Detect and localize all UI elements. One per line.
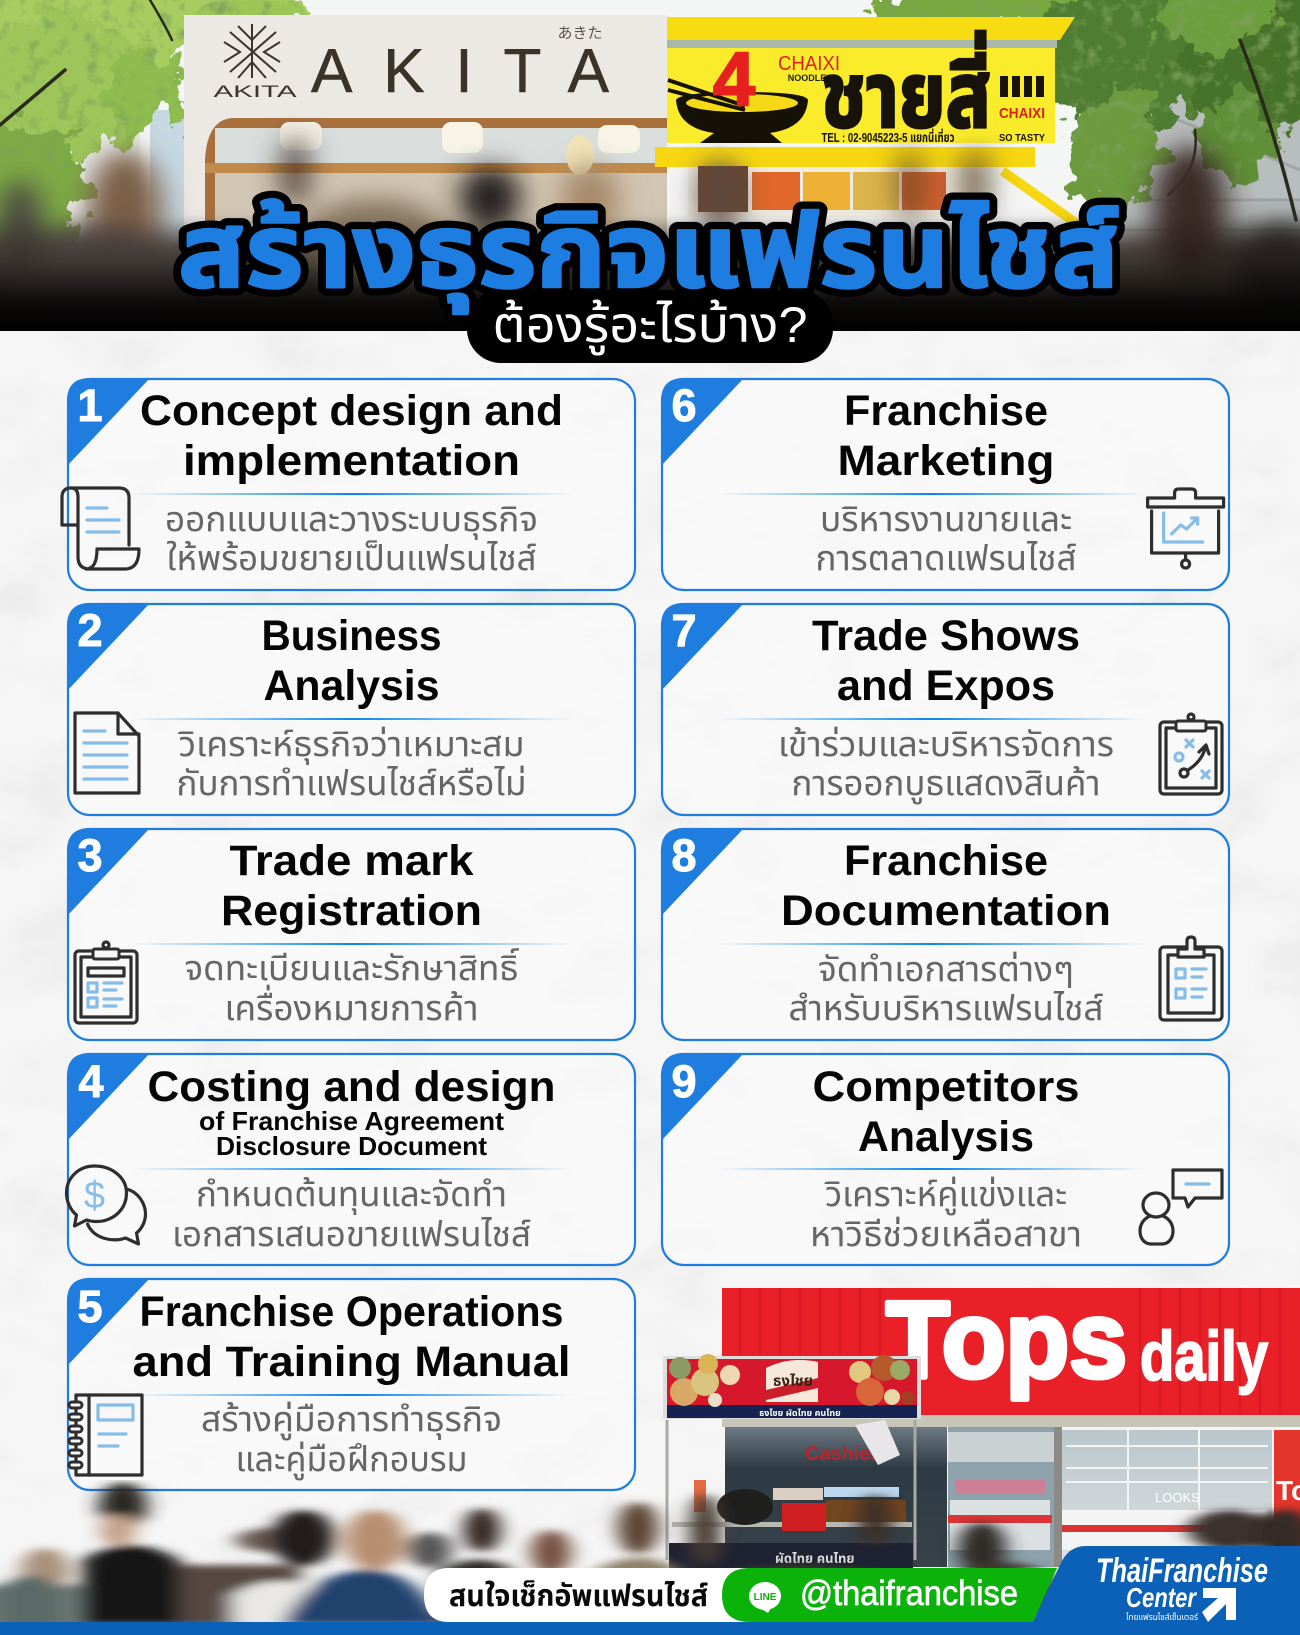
photo: Tops daily store: daily xyxy=(1140,1317,1268,1395)
subtitle pill: ต้องรู้อะไรบ้าง? xyxy=(492,297,808,355)
cart counter xyxy=(669,1420,913,1568)
cart counter: ผัดไทย คนไทย xyxy=(775,1551,854,1566)
Chaixi yellow sign: TEL : 02-9045223-5 แยกนี่เที่ยว xyxy=(822,128,955,145)
card 3 xyxy=(67,828,635,1040)
card 8 xyxy=(661,828,1229,1040)
icon: logo arrow xyxy=(1202,1588,1236,1622)
card 9: หาวิธีช่วยเหลือสาขา xyxy=(810,1215,1082,1254)
photo: food cart: ธงไชย xyxy=(773,1373,813,1390)
card 7 xyxy=(661,603,1229,815)
CTA: white pill xyxy=(424,1568,770,1622)
card 4 xyxy=(66,1053,635,1265)
card 5: 5 xyxy=(77,1281,103,1332)
background buildings xyxy=(85,94,1300,246)
CTA: green LINE pill xyxy=(722,1568,1057,1622)
tree trunks xyxy=(0,0,1296,220)
card 1 xyxy=(62,378,635,590)
card 5: Franchise Operations xyxy=(140,1288,564,1336)
card 6: Marketing xyxy=(838,437,1054,485)
card 2: Business xyxy=(262,612,442,660)
food strip xyxy=(698,166,946,212)
noodle bowl xyxy=(676,92,808,143)
card 7: เข้าร่วมและบริหารจัดการ xyxy=(778,725,1114,764)
card 7: and Expos xyxy=(837,662,1055,710)
icon: spiral notebook xyxy=(69,1395,142,1475)
icon: document xyxy=(75,713,139,793)
card 1: ออกแบบและวางระบบธุรกิจ xyxy=(165,500,538,540)
Akita store wall: あきた xyxy=(557,25,603,42)
card 6: บริหารงานขายและ xyxy=(820,500,1072,539)
trees right xyxy=(870,0,1300,215)
card 6: Franchise xyxy=(844,387,1048,435)
Akita store wall: AKITA xyxy=(311,37,610,106)
card 9 xyxy=(661,1053,1229,1265)
card 2: กับการทำแฟรนไชส์หรือไม่ xyxy=(176,764,526,803)
card 8: จัดทำเอกสารต่างๆ xyxy=(818,950,1074,989)
card 9: Competitors xyxy=(812,1063,1080,1111)
CTA: green LINE pill: @thaifranchise xyxy=(800,1574,1018,1613)
Akita store wall xyxy=(184,15,667,245)
card 4: 4 xyxy=(78,1056,104,1107)
Akita snowflake logo xyxy=(224,24,280,78)
card 2: วิเคราะห์ธุรกิจว่าเหมาะสม xyxy=(178,725,524,765)
card 4: กำหนดต้นทุนและจัดทำ xyxy=(196,1175,507,1215)
icon: chat bubbles with dollar xyxy=(66,1166,146,1244)
subtitle pill xyxy=(467,290,833,363)
main title: สร้างธุรกิจแฟรนไชส์ xyxy=(178,194,1119,314)
card 9: วิเคราะห์คู่แข่งและ xyxy=(825,1175,1067,1215)
trees left xyxy=(0,0,310,260)
icon: LINE xyxy=(749,1582,781,1613)
card 3: Trade mark xyxy=(230,837,474,885)
card 8: Documentation xyxy=(781,887,1111,935)
photo: Tops daily store xyxy=(722,1279,1300,1567)
card 5: สร้างคู่มือการทำธุรกิจ xyxy=(201,1400,502,1440)
CTA: white pill: สนใจเช็กอัพแฟรนไชส์ xyxy=(449,1579,708,1613)
photo: food cart: ธงไชย ผัดไทย คนไทย xyxy=(759,1408,841,1418)
card 1: 1 xyxy=(77,380,103,431)
Chaixi yellow sign: CHAIXI xyxy=(778,53,840,75)
ThaiFranchise Center logo panel: Center xyxy=(1126,1582,1198,1613)
card 2: Analysis xyxy=(264,662,440,710)
card 1: ให้พร้อมขยายเป็นแฟรนไชส์ xyxy=(166,539,537,578)
icon: clipboard checklist xyxy=(1160,937,1222,1020)
card 5: และคู่มือฝึกอบรม xyxy=(236,1440,468,1480)
icon: person with speech bubble xyxy=(1140,1170,1222,1244)
icon: chat bubbles with dollar: $ xyxy=(84,1175,105,1217)
card 4: เอกสารเสนอขายแฟรนไชส์ xyxy=(172,1215,531,1254)
card 3: เครื่องหมายการค้า xyxy=(224,984,478,1028)
Chaixi yellow sign: ชายสี่ xyxy=(821,31,991,147)
Chaixi yellow sign: NOODLES xyxy=(788,73,832,83)
card 4: of Franchise Agreement xyxy=(199,1106,504,1136)
photo: food cart xyxy=(663,1354,921,1568)
card 9: 9 xyxy=(671,1056,697,1107)
Akita store wall: AKITA xyxy=(214,82,298,101)
card 5: and Training Manual xyxy=(132,1338,570,1386)
icon: presentation board xyxy=(1148,489,1224,568)
Akita wooden cafe frame with lamps xyxy=(205,118,667,235)
card 8: 8 xyxy=(671,830,697,881)
card 1: implementation xyxy=(183,437,520,485)
Chaixi yellow sign: CHAIXI xyxy=(999,105,1045,122)
icon: scroll xyxy=(62,488,139,569)
icon: clipboard strategy xyxy=(1160,714,1222,794)
header photo: storefronts and crowd xyxy=(0,0,1300,345)
card 9: Analysis xyxy=(858,1113,1034,1161)
photo: Tops daily store: Cashier xyxy=(805,1443,879,1465)
card 6 xyxy=(661,378,1229,590)
ThaiFranchise Center logo panel: ไทยแฟรนไชส์เซ็นเตอร์ xyxy=(1125,1612,1199,1622)
card 3: จดทะเบียนและรักษาสิทธิ์ xyxy=(184,948,519,988)
card 2 xyxy=(67,603,635,815)
card 1: Concept design and xyxy=(140,387,563,435)
main title: สร้างธุรกิจแฟรนไชส์ xyxy=(178,194,1119,314)
card 7: 7 xyxy=(671,605,697,656)
Chaixi yellow sign xyxy=(655,17,1080,225)
header dark fade xyxy=(0,215,1300,331)
card 6: 6 xyxy=(671,380,697,431)
card 3: 3 xyxy=(77,830,103,881)
card 7: Trade Shows xyxy=(812,612,1080,660)
card 5 xyxy=(67,1278,635,1490)
ThaiFranchise Center logo panel xyxy=(1033,1546,1300,1622)
Chaixi yellow sign: 4 xyxy=(713,37,755,122)
card 8: Franchise xyxy=(844,837,1048,885)
photo: Tops daily store: Tops xyxy=(886,1279,1127,1401)
footer blue bar xyxy=(0,1622,1300,1635)
Chaixi yellow sign: SO TASTY xyxy=(999,133,1045,144)
card 6: การตลาดแฟรนไชส์ xyxy=(816,539,1077,578)
card 3: Registration xyxy=(221,887,482,935)
blurred crowd at the bottom xyxy=(0,1482,1300,1630)
icon: clipboard form xyxy=(75,942,137,1023)
card 4: Disclosure Document xyxy=(216,1131,487,1161)
card 4: Costing and design xyxy=(148,1063,556,1111)
blurred crowd xyxy=(0,136,1300,345)
card 8: สำหรับบริหารแฟรนไชส์ xyxy=(788,989,1104,1028)
icon: LINE: LINE xyxy=(754,1592,777,1603)
card 7: การออกบูธแสดงสินค้า xyxy=(792,764,1100,804)
card 2: 2 xyxy=(77,605,103,656)
photo: Tops daily store: LOOKS xyxy=(1155,1490,1200,1505)
